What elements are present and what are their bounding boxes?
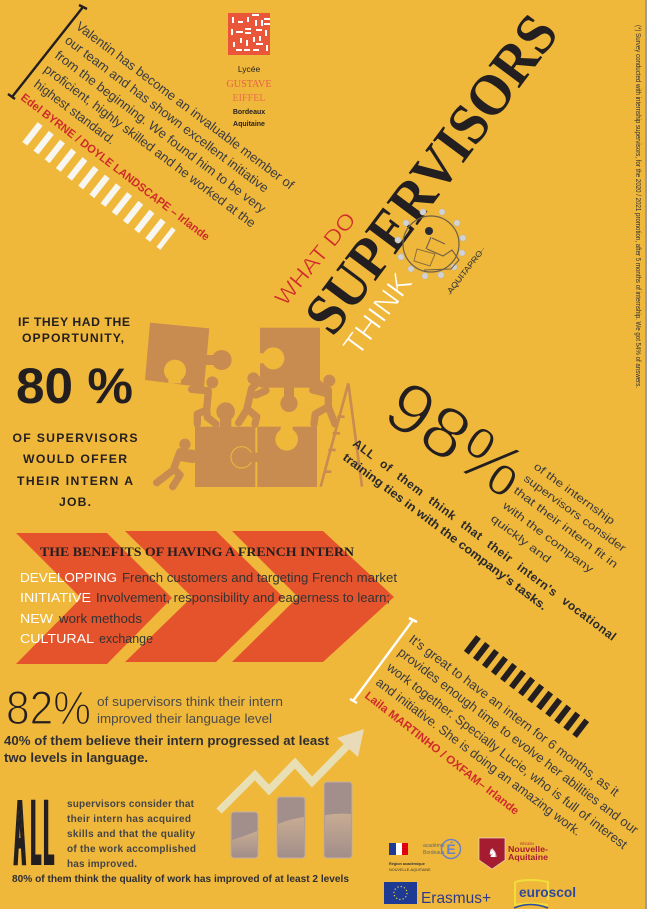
logo: Nouvelle-Aquitaine region: ♞ (488, 846, 498, 860)
puzzle piece bottom left (195, 402, 255, 487)
bold statement: training ties in with the company's tasks. (340, 450, 550, 613)
description: quickly and (488, 513, 553, 566)
benefits list: CULTURAL (20, 631, 94, 646)
quote text: work together. Specially Lucie, who is full of interest (383, 659, 631, 852)
stat block: 80 percent: IF THEY HAD THE (18, 315, 130, 329)
logo: French Republic academy: É (446, 841, 456, 857)
quote text (31, 18, 297, 230)
logo: Lycée Gustave Eiffel: EIFFEL (232, 93, 266, 104)
quote: Laila Martinho (350, 618, 642, 852)
white stripes decoration (30, 132, 168, 240)
logo: Nouvelle-Aquitaine region: Aquitaine (508, 852, 548, 862)
logo: Erasmus+ (384, 882, 491, 907)
puzzle piece bottom right (231, 426, 317, 487)
stat block: 80 percent: JOB. (59, 495, 91, 509)
logo: Lycée Gustave Eiffel: Bordeaux (233, 109, 265, 116)
logo: euroscol (514, 880, 576, 908)
logo: Lycée Gustave Eiffel: GUSTAVE (226, 79, 272, 90)
logo: French Republic academy: NOUVELLE-AQUITAINE (389, 868, 431, 872)
rising arrow (219, 729, 364, 811)
quote text: provides enough time to evolve her abilities and our (395, 644, 642, 837)
quote attribution: Edel BYRNE / DOYLE LANDSCAPE – Irlande (18, 92, 211, 244)
benefits list: INITIATIVE (20, 590, 91, 605)
big word all: ALL (15, 780, 55, 886)
title: think: THINK (337, 267, 419, 362)
puzzle piece top right (259, 328, 320, 412)
title: what do: WHAT DO (270, 207, 361, 310)
logo: French Republic academy: académie (423, 843, 445, 849)
benefits list: NEW (20, 611, 54, 626)
quote text: proficient, highly skilled and he worked at the (41, 61, 259, 230)
stat block: 82 percent: improved their language level (97, 711, 272, 726)
bars (231, 782, 352, 858)
benefits list: work methods (58, 611, 143, 626)
benefits list: French customers and targeting French market (122, 570, 397, 585)
logo: Erasmus+: Erasmus+ (421, 890, 491, 907)
survey footnote: (*) Survey conducted with internship supervisors, for the 2020 / 2021 promotion, after 5 months of internship. We got 54% of answers. (634, 25, 643, 388)
puzzle piece top left (145, 323, 232, 387)
stat block: all supervisors: has improved. (67, 859, 137, 870)
illustration: people assembling puzzle (145, 323, 362, 487)
description: of the internship (531, 461, 617, 527)
quote text: and initiative. She is doing an amazing work. (373, 674, 584, 839)
logo: Nouvelle-Aquitaine region: Nouvelle- (508, 844, 548, 854)
bold statement: ALL of them think that their intern's vocational (350, 436, 619, 644)
description (488, 461, 628, 576)
quote text: highest standard. (31, 76, 118, 147)
stat block: 82 percent: 40% of them believe their intern progressed at least (4, 733, 330, 748)
benefits list: DEVELOPPING (20, 570, 117, 585)
dark stripes decoration (470, 643, 583, 730)
stat block: 82 percent (4, 681, 330, 765)
stat number 80 percent: 80 % (16, 358, 133, 414)
stat block: 98 percent (340, 365, 628, 644)
benefits list: exchange (99, 631, 153, 646)
quote text: from the beginning. We found him to be very (52, 47, 269, 216)
title (270, 2, 571, 362)
stat block: all supervisors: supervisors consider that (67, 799, 195, 810)
bar chart with rising arrow (219, 729, 364, 858)
description: that their intern fit in (511, 485, 620, 571)
stat block: all supervisors: skills and that the quality (67, 829, 195, 840)
stat number 98 percent: 98% (371, 365, 541, 514)
stat block: 82 percent: two levels in language. (4, 750, 148, 765)
logo: Lycée Gustave Eiffel: Lycée (238, 64, 260, 74)
logo: French Republic academy (389, 840, 460, 872)
logo: Aquitapro: AQUITAPRO (445, 249, 485, 295)
stat block: all supervisors (12, 780, 349, 886)
people and ladder (157, 376, 362, 487)
benefits list: Involvement, responsibility and eagerness to learn; (96, 590, 390, 605)
logo: Aquitapro (395, 209, 485, 295)
quote attribution: Laila MARTINHO / OXFAM– Irlande (362, 690, 521, 818)
logo: euroscol: euroscol (519, 885, 576, 900)
logo: French Republic academy: Bordeaux (423, 850, 445, 856)
stat block: 80 percent (12, 315, 138, 509)
stat block: all supervisors: their intern has acquired (67, 814, 191, 825)
benefits list (20, 570, 397, 646)
stat block: 80 percent: OF SUPERVISORS (12, 431, 138, 445)
stat block: 80 percent: WOULD OFFER (23, 452, 127, 466)
logo: Nouvelle-Aquitaine region (479, 838, 548, 869)
stat block: 82 percent: of supervisors think their intern (97, 694, 283, 709)
partner logos (384, 838, 576, 908)
logo: Lycée Gustave Eiffel: Aquitaine (233, 121, 265, 128)
benefits heading: THE BENEFITS OF HAVING A FRENCH INTERN (40, 545, 354, 559)
logo: French Republic academy: Région académique (389, 862, 425, 866)
stat number 82 percent: 82% (6, 681, 91, 734)
stat block: 80 percent: THEIR INTERN A (17, 474, 133, 488)
quote text: It's great to have an intern for 6 months, as it (406, 631, 622, 799)
stat block: all supervisors: of the work accomplished (67, 844, 196, 855)
stat block: 80 percent: OPPORTUNITY, (22, 331, 124, 345)
logo: Nouvelle-Aquitaine region: RÉGION (520, 841, 534, 846)
logo: Lycée Gustave Eiffel (226, 13, 272, 128)
quote: Edel Byrne (8, 5, 297, 244)
quote text: our team and has shown excellent initiative (62, 32, 272, 195)
description: supervisors consider (521, 473, 628, 555)
quote text: Valentin has become an invaluable member of (73, 18, 297, 193)
description: with the company (499, 499, 596, 576)
panel: benefits chevrons (16, 531, 397, 664)
stat block: all supervisors: 80% of them think the quality of work has improved of at least 2 levels (12, 873, 349, 885)
chevrons (16, 531, 394, 664)
big word all: ALL (13, 780, 53, 886)
